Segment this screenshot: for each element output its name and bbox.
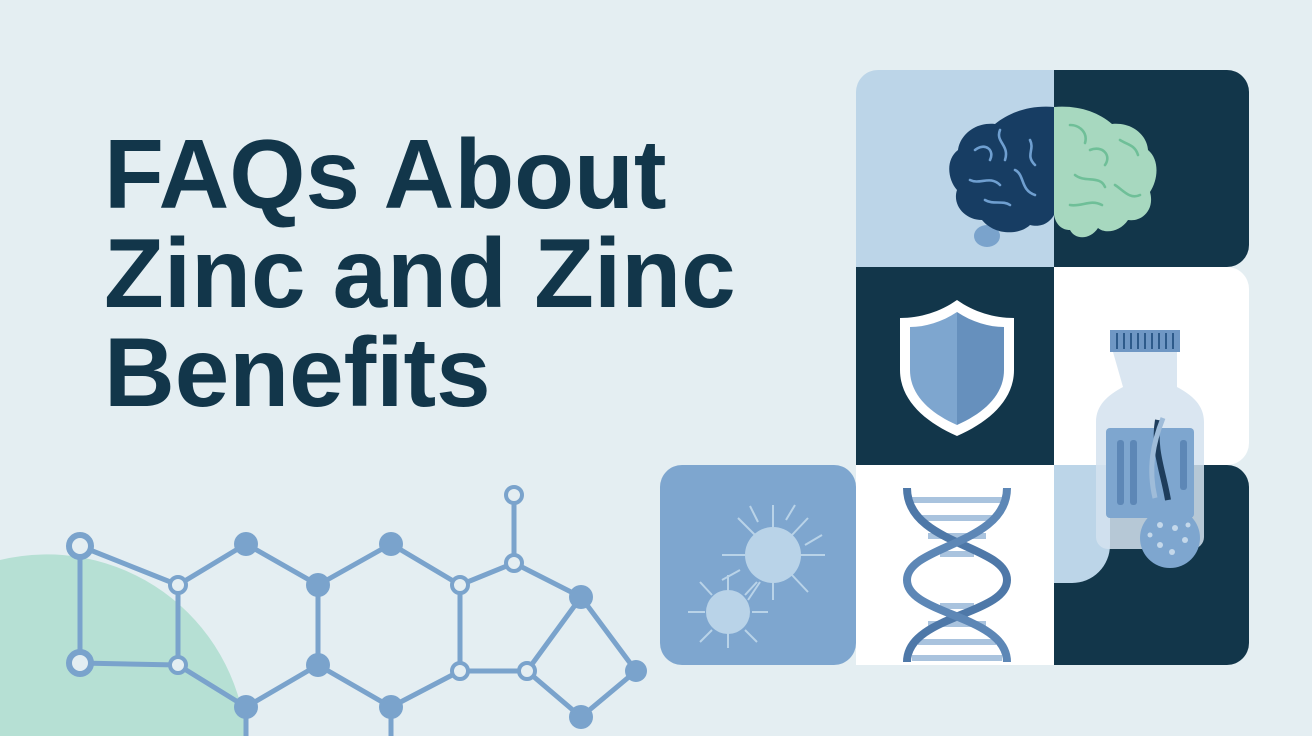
title: Zinc and Zinc — [104, 218, 736, 328]
tile: shield — [856, 267, 1054, 465]
green circle — [0, 554, 246, 736]
title — [104, 119, 736, 427]
tile: virus — [660, 465, 856, 665]
tile: dark bottom right — [1054, 465, 1249, 665]
tile: brain — [856, 70, 1249, 267]
tile: DNA — [856, 465, 1054, 665]
title: FAQs About — [104, 119, 667, 229]
tile: white with bottle — [1054, 267, 1249, 465]
title: Benefits — [104, 317, 491, 427]
molecule diagram — [80, 495, 636, 736]
icon: supplement bottle — [1096, 330, 1204, 568]
